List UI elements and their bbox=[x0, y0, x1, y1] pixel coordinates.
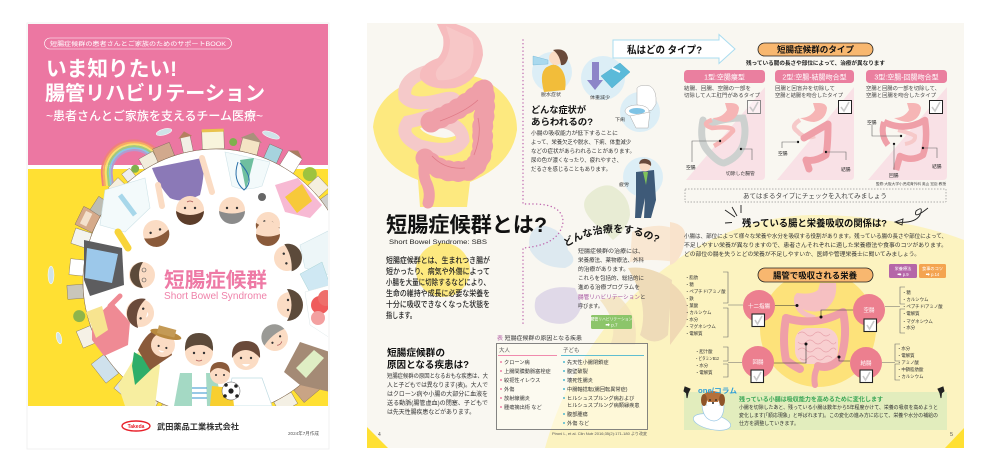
list: duodenum nutrients: ・マグネシウム bbox=[685, 323, 716, 330]
list: duodenum nutrients: ・カルシウム bbox=[685, 309, 712, 316]
text block: treatment: 短腸症候群の治療には、 bbox=[578, 247, 644, 255]
list: colon nutrients bbox=[882, 344, 924, 380]
arrow: which type am I bbox=[613, 34, 735, 64]
panel: type 1: 切除して人工肛門があるタイプ bbox=[684, 92, 760, 99]
issue date: 2024年7月作成 bbox=[288, 430, 320, 437]
heading: symptoms: あらわれるの? bbox=[531, 117, 593, 127]
person: doctor with stethoscope bbox=[219, 152, 270, 224]
list: duodenum nutrients: ・糖 bbox=[685, 281, 694, 288]
button: meal tips link: ➡ p.14 bbox=[926, 272, 940, 277]
panel: one point column: 変化します(「順応現象」と呼ばれます)。この変化の進み方に応じて、栄養や水分の補給の bbox=[739, 411, 938, 419]
types subtitle: 残っている腸の長さや部位によって、治療が異なります bbox=[746, 59, 886, 67]
company logo: 武田薬品工業株式会社 bbox=[157, 422, 240, 432]
text block: symptoms bbox=[531, 129, 635, 173]
person: man in grey suit with tablet bbox=[84, 240, 155, 296]
treatment flower petals bbox=[529, 185, 688, 345]
child list bbox=[563, 358, 640, 427]
person: woman with flowers bbox=[277, 286, 328, 337]
child list: 外傷 など bbox=[567, 419, 590, 427]
panel: type 2: 結腸 bbox=[841, 166, 851, 173]
cover title: いま知りたい! bbox=[46, 58, 177, 81]
panel: spread pages 4-5 bbox=[367, 23, 964, 448]
arrow: which type am I: 私はどの タイプ? bbox=[627, 44, 702, 56]
symptom: dehydration icon: 脱水症状 bbox=[541, 91, 561, 98]
panel: type 1: 切除した腸管 bbox=[726, 170, 755, 177]
cover center title bbox=[164, 269, 267, 302]
person: woman with straw hat and green scarf bbox=[118, 323, 183, 406]
emphasis rays bbox=[725, 205, 741, 223]
adult list: 腫瘍摘出術 など bbox=[504, 403, 543, 411]
column badge: one/コラム bbox=[698, 387, 737, 395]
table: causes of SBS: 表 短腸症候群の原因となる疾患 bbox=[497, 334, 582, 342]
page number 5 bbox=[945, 428, 964, 448]
pill: nutrients absorbed: 腸管で吸収される栄養 bbox=[773, 270, 857, 280]
panel: cover page bbox=[27, 23, 349, 449]
button: nutrition therapy link: 栄養療法 bbox=[895, 265, 912, 272]
dashed check prompt: あてはまるタイプにチェックを入れてみましょう bbox=[743, 191, 887, 200]
list: jejunum nutrients: ・糖 bbox=[902, 289, 911, 296]
heading: causes bbox=[387, 346, 469, 371]
text block: causes: は先天性腸疾患などがあります。 bbox=[387, 408, 475, 416]
heading: remaining bowel and absorption: 残っている腸と栄養吸収の関係は? bbox=[742, 218, 887, 230]
town buildings around the circle bbox=[67, 129, 341, 420]
text block: treatment: 進める治療プログラムを bbox=[578, 283, 640, 291]
text block: treatment: これらを包括的、総括的に bbox=[578, 274, 644, 282]
table source: Pironi L, et al. Clin Nutr 2016;35(2):171-180 より改変 bbox=[552, 431, 647, 436]
child list: 壊死性腸炎 bbox=[567, 376, 593, 384]
text block: SBS definition: 指します。 bbox=[386, 310, 416, 320]
page number 5: 5 bbox=[950, 432, 953, 438]
cover title: 腸管リハビリテーション bbox=[45, 82, 265, 105]
child list: 中腸軸捻転(腸回転異常症) bbox=[567, 385, 628, 393]
heading: what is SBS: Short Bowel Syndrome: SBS bbox=[389, 239, 488, 246]
adult list: 絞扼性イレウス bbox=[504, 376, 540, 384]
list: jejunum nutrients: ・ペプチド/アミノ酸 bbox=[902, 303, 943, 310]
text block: absorption explanation bbox=[684, 232, 947, 258]
list: jejunum nutrients: ・カルシウム bbox=[902, 296, 929, 303]
adult list: クローン病 bbox=[504, 359, 530, 366]
panel: type 3: 3型:空腸-回腸吻合型 bbox=[874, 72, 939, 82]
illustration: large digestive tract bbox=[405, 24, 485, 203]
heading: causes: 原因となる疾患は? bbox=[387, 358, 469, 371]
list: ileum nutrients: ・水分 bbox=[695, 362, 709, 369]
text block: causes: 短腸症候群の原因となるおもな疾患は、大 bbox=[387, 372, 488, 380]
heading: symptoms bbox=[531, 104, 593, 127]
list: jejunum nutrients: ・電解質 bbox=[902, 310, 920, 317]
list: jejunum nutrients bbox=[885, 287, 943, 333]
list: colon nutrients: ・カルシウム bbox=[897, 373, 924, 380]
cover center title: 短腸症候群 bbox=[164, 269, 267, 292]
panel: type 3: 空腸と回腸を吻合したタイプ bbox=[866, 92, 936, 99]
cover pink header band bbox=[28, 24, 328, 165]
icon: pins bbox=[684, 387, 944, 398]
adult list: 上腸間膜動脈塞栓症 bbox=[504, 367, 551, 375]
panel: type 1: 1型:空腸瘻型 bbox=[704, 72, 745, 82]
heading: treatment (curved): どんな治療をするの? bbox=[564, 224, 660, 246]
site: ileum: 回腸 bbox=[752, 359, 764, 366]
heading: causes: 短腸症候群の bbox=[387, 346, 445, 359]
list: duodenum nutrients: ・水分 bbox=[685, 316, 699, 323]
pill: SBS types bbox=[758, 43, 873, 56]
text block: absorption explanation: どの部位の腸を失うとどの栄養が不足しやすいか、医師や管理栄養士に聞いてみましょう。 bbox=[684, 250, 920, 258]
button: intestinal rehab page link bbox=[591, 315, 633, 329]
yellow blobs behind intestine bbox=[373, 73, 517, 297]
child list: 腹壁破裂 bbox=[567, 367, 588, 375]
table: causes of SBS: 子ども bbox=[563, 346, 580, 354]
cover subtitle pill: 短腸症候群の患者さんとご家族のためのサポートBOOK bbox=[50, 40, 227, 48]
site: colon bbox=[838, 347, 882, 382]
adult list: 放射線腸炎 bbox=[504, 394, 530, 402]
button: meal tips link bbox=[919, 264, 946, 278]
text block: treatment bbox=[578, 247, 646, 310]
illustration: digestive tract with absorption sites bbox=[760, 271, 876, 387]
icon: dog in teacup bbox=[692, 390, 732, 433]
person: man with clipboard bbox=[271, 230, 330, 291]
person: elderly man in brown vest bbox=[261, 324, 328, 392]
text block: SBS definition bbox=[386, 255, 490, 320]
button: nutrition therapy link bbox=[889, 264, 917, 278]
text block: treatment: 栄養療法、薬物療法、外科 bbox=[578, 256, 644, 264]
pill: SBS types: 短腸症候群のタイプ bbox=[777, 44, 855, 54]
cover title: ~患者さんとご家族を支えるチーム医療~ bbox=[46, 108, 263, 123]
supervision note: 監修:大阪大学小児成育外科 奥山 宏臣 教授 bbox=[876, 181, 946, 186]
button: meal tips link: 食事のコツ bbox=[922, 265, 943, 272]
person: mother bbox=[226, 341, 272, 406]
page number 4: 4 bbox=[378, 432, 381, 438]
panel: one point column: 小腸を切除したあと、残っている小腸は数年から5年程度かけて、栄養の吸収を高めようと bbox=[739, 403, 938, 411]
icon: rainbow bbox=[100, 139, 156, 186]
person: purple shirt man bbox=[152, 158, 212, 225]
panel: type 1 bbox=[684, 70, 765, 180]
clouds bbox=[48, 127, 280, 344]
panel: type 3: 空腸 bbox=[867, 120, 877, 126]
panel: type 2 bbox=[775, 70, 854, 180]
site: ileum bbox=[742, 342, 808, 382]
symptom: diarrhea toilet icon: 下痢 bbox=[615, 117, 625, 123]
panel: type 2: 2型:空腸-結腸吻合型 bbox=[782, 72, 847, 82]
panel: type 2: 空腸と結腸を吻合したタイプ bbox=[775, 92, 843, 99]
text block: treatment: 的治療があります。 bbox=[578, 265, 629, 273]
dotted divider bbox=[523, 40, 563, 325]
panel: type 3: 結腸 bbox=[932, 163, 942, 170]
panel: type 3: 空腸と回腸の一部を切除して、 bbox=[866, 85, 940, 92]
text block: causes: 人と子どもでは異なります(表)。大人で bbox=[387, 381, 488, 389]
list: colon nutrients: ・水分 bbox=[897, 345, 911, 352]
list: duodenum nutrients: ・脂肪 bbox=[685, 274, 699, 281]
page number 4 bbox=[367, 427, 388, 448]
text block: symptoms: 尿の色が濃くなったり、疲れやすさ、 bbox=[531, 156, 622, 164]
person: nurse with yellow clipboard bbox=[256, 178, 322, 230]
text block: treatment: 呼びます。 bbox=[578, 302, 603, 310]
person: right upper woman bbox=[256, 221, 280, 246]
child list: ヒルシュスプルング病類縁疾患 bbox=[567, 401, 640, 409]
heading: remaining bowel and absorption bbox=[725, 205, 928, 230]
text block: absorption explanation: 小腸は、部位によって様々な栄養や水分を吸収する役割があります。残っている腸の長さや部位によって、 bbox=[684, 232, 947, 240]
text block: treatment: と bbox=[640, 294, 646, 301]
white central circle bbox=[82, 148, 328, 406]
text block: absorption explanation: 不足しやすい栄養が異なりますので、患者さんそれぞれに適した栄養療法や食事のコツがあります。 bbox=[684, 241, 947, 249]
button: intestinal rehab page link: 腸管リハビリテーション bbox=[591, 316, 633, 322]
person: woman in pink coat bbox=[86, 295, 157, 356]
panel: type 3 bbox=[866, 70, 947, 180]
text block: causes: はクローン病や小腸の大部分に血液を bbox=[387, 390, 488, 398]
panel: type 2: 空腸 bbox=[778, 151, 788, 157]
person: doctor woman at upper left bbox=[100, 178, 173, 251]
adult list bbox=[500, 359, 551, 411]
child list: 腹部腫瘍 bbox=[567, 410, 588, 418]
table: causes of SBS bbox=[496, 334, 648, 430]
heading: what is SBS: 短腸症候群とは? bbox=[386, 214, 547, 237]
text block: SBS definition: 小腸を大量に切除するなどにより、 bbox=[386, 277, 490, 287]
text block: SBS definition: 十分に吸収できなくなった状態を bbox=[386, 299, 490, 309]
text block: causes: 送る動脈(腸管虚血)の閉塞、子どもで bbox=[387, 399, 488, 407]
text block: SBS definition: 生命の維持や成長に必要な栄養を bbox=[386, 288, 490, 298]
text block: SBS definition: 短腸症候群とは、生まれつき腸が bbox=[386, 255, 490, 265]
list: duodenum nutrients: ・電解質 bbox=[685, 330, 703, 337]
button: nutrition therapy link: ➡ p.9 bbox=[897, 272, 909, 277]
pill: nutrients absorbed bbox=[758, 268, 873, 282]
text block: causes bbox=[387, 372, 488, 416]
site: colon: 結腸 bbox=[860, 359, 872, 367]
table: causes of SBS: 大人 bbox=[499, 346, 511, 354]
list: ileum nutrients: ・電解質 bbox=[695, 369, 713, 376]
curly arrow bbox=[895, 208, 928, 225]
panel: one point column: 仕方を調整していきます。 bbox=[739, 419, 799, 427]
child list: ヒルシュスプルング病および bbox=[567, 394, 635, 402]
cover title bbox=[45, 58, 265, 123]
list: ileum nutrients: ・胆汁酸 bbox=[695, 348, 713, 355]
list: jejunum nutrients: ・マグネシウム bbox=[902, 318, 933, 325]
site: duodenum: 十二指腸 bbox=[748, 302, 770, 310]
child list: 先天性小腸閉鎖症 bbox=[567, 358, 609, 366]
site: duodenum bbox=[743, 290, 798, 326]
list: colon nutrients: ・電解質 bbox=[897, 352, 915, 359]
text block: symptoms: よって、栄養欠乏や脱水、下痢、体重減少 bbox=[531, 138, 631, 146]
symptom: diarrhea toilet icon bbox=[615, 85, 660, 132]
symptom: weight loss icon: 体重減少 bbox=[590, 94, 610, 101]
pale yellow background shape bbox=[545, 215, 964, 448]
panel: one point column bbox=[684, 387, 947, 433]
button: intestinal rehab page link: ➡ p.7 bbox=[605, 322, 618, 328]
text block: SBS definition: 短かったり、病気や外傷によって bbox=[386, 266, 490, 276]
symptom: fatigue icon: 疲労 bbox=[619, 181, 629, 188]
person: child with soccer ball bbox=[210, 362, 240, 406]
heading: symptoms: どんな症状が bbox=[531, 104, 586, 115]
list: duodenum nutrients: ・鉄 bbox=[685, 295, 694, 302]
cover subtitle pill bbox=[44, 38, 232, 49]
panel: type 2: 回腸と回盲弁を切除して bbox=[775, 85, 835, 92]
symptom: dehydration icon bbox=[532, 49, 572, 98]
site: jejunum: 空腸 bbox=[863, 307, 875, 314]
person: young father bbox=[174, 333, 222, 406]
text block: symptoms: 小腸の吸収能力が低下することに bbox=[531, 129, 618, 137]
list: duodenum nutrients: ・ペプチド/アミノ酸 bbox=[685, 288, 726, 295]
symptom: fatigue icon bbox=[619, 157, 663, 218]
list: jejunum nutrients: ・水分 bbox=[902, 324, 916, 331]
company logo bbox=[122, 421, 240, 432]
cover illustration: town ring and people bbox=[48, 128, 328, 406]
dashed check prompt bbox=[685, 189, 946, 202]
text block: symptoms: だるさを感じることもあります。 bbox=[531, 165, 611, 173]
text block: treatment: 腸管リハビリテーション bbox=[578, 293, 640, 301]
cover center title: Short Bowel Syndrome bbox=[164, 290, 267, 302]
list: duodenum nutrients: ・葉酸 bbox=[685, 302, 699, 309]
panel: one point column: 残っている小腸は吸収能力を高めるために変化します bbox=[739, 396, 883, 404]
list: colon nutrients: ・アミノ酸 bbox=[897, 359, 919, 366]
site: jejunum bbox=[820, 294, 885, 332]
list: colon nutrients: ・中鎖脂肪酸 bbox=[897, 366, 924, 373]
cover yellow band bbox=[28, 169, 328, 406]
company logo: Takeda bbox=[128, 424, 145, 430]
panel: type 1: 空腸 bbox=[686, 165, 696, 171]
list: ileum nutrients bbox=[695, 347, 742, 377]
list: duodenum nutrients bbox=[685, 272, 743, 337]
symptom: weight loss icon bbox=[581, 56, 630, 101]
adult list: 外傷 bbox=[504, 385, 514, 393]
panel: type 1: 結腸、回腸、空腸の一部を bbox=[684, 85, 751, 92]
panel: type 3: 回腸 bbox=[889, 173, 899, 179]
list: ileum nutrients: ・ビタミンB12 bbox=[695, 355, 719, 362]
text block: symptoms: などの症状があらわれることがあります。 bbox=[531, 147, 635, 155]
